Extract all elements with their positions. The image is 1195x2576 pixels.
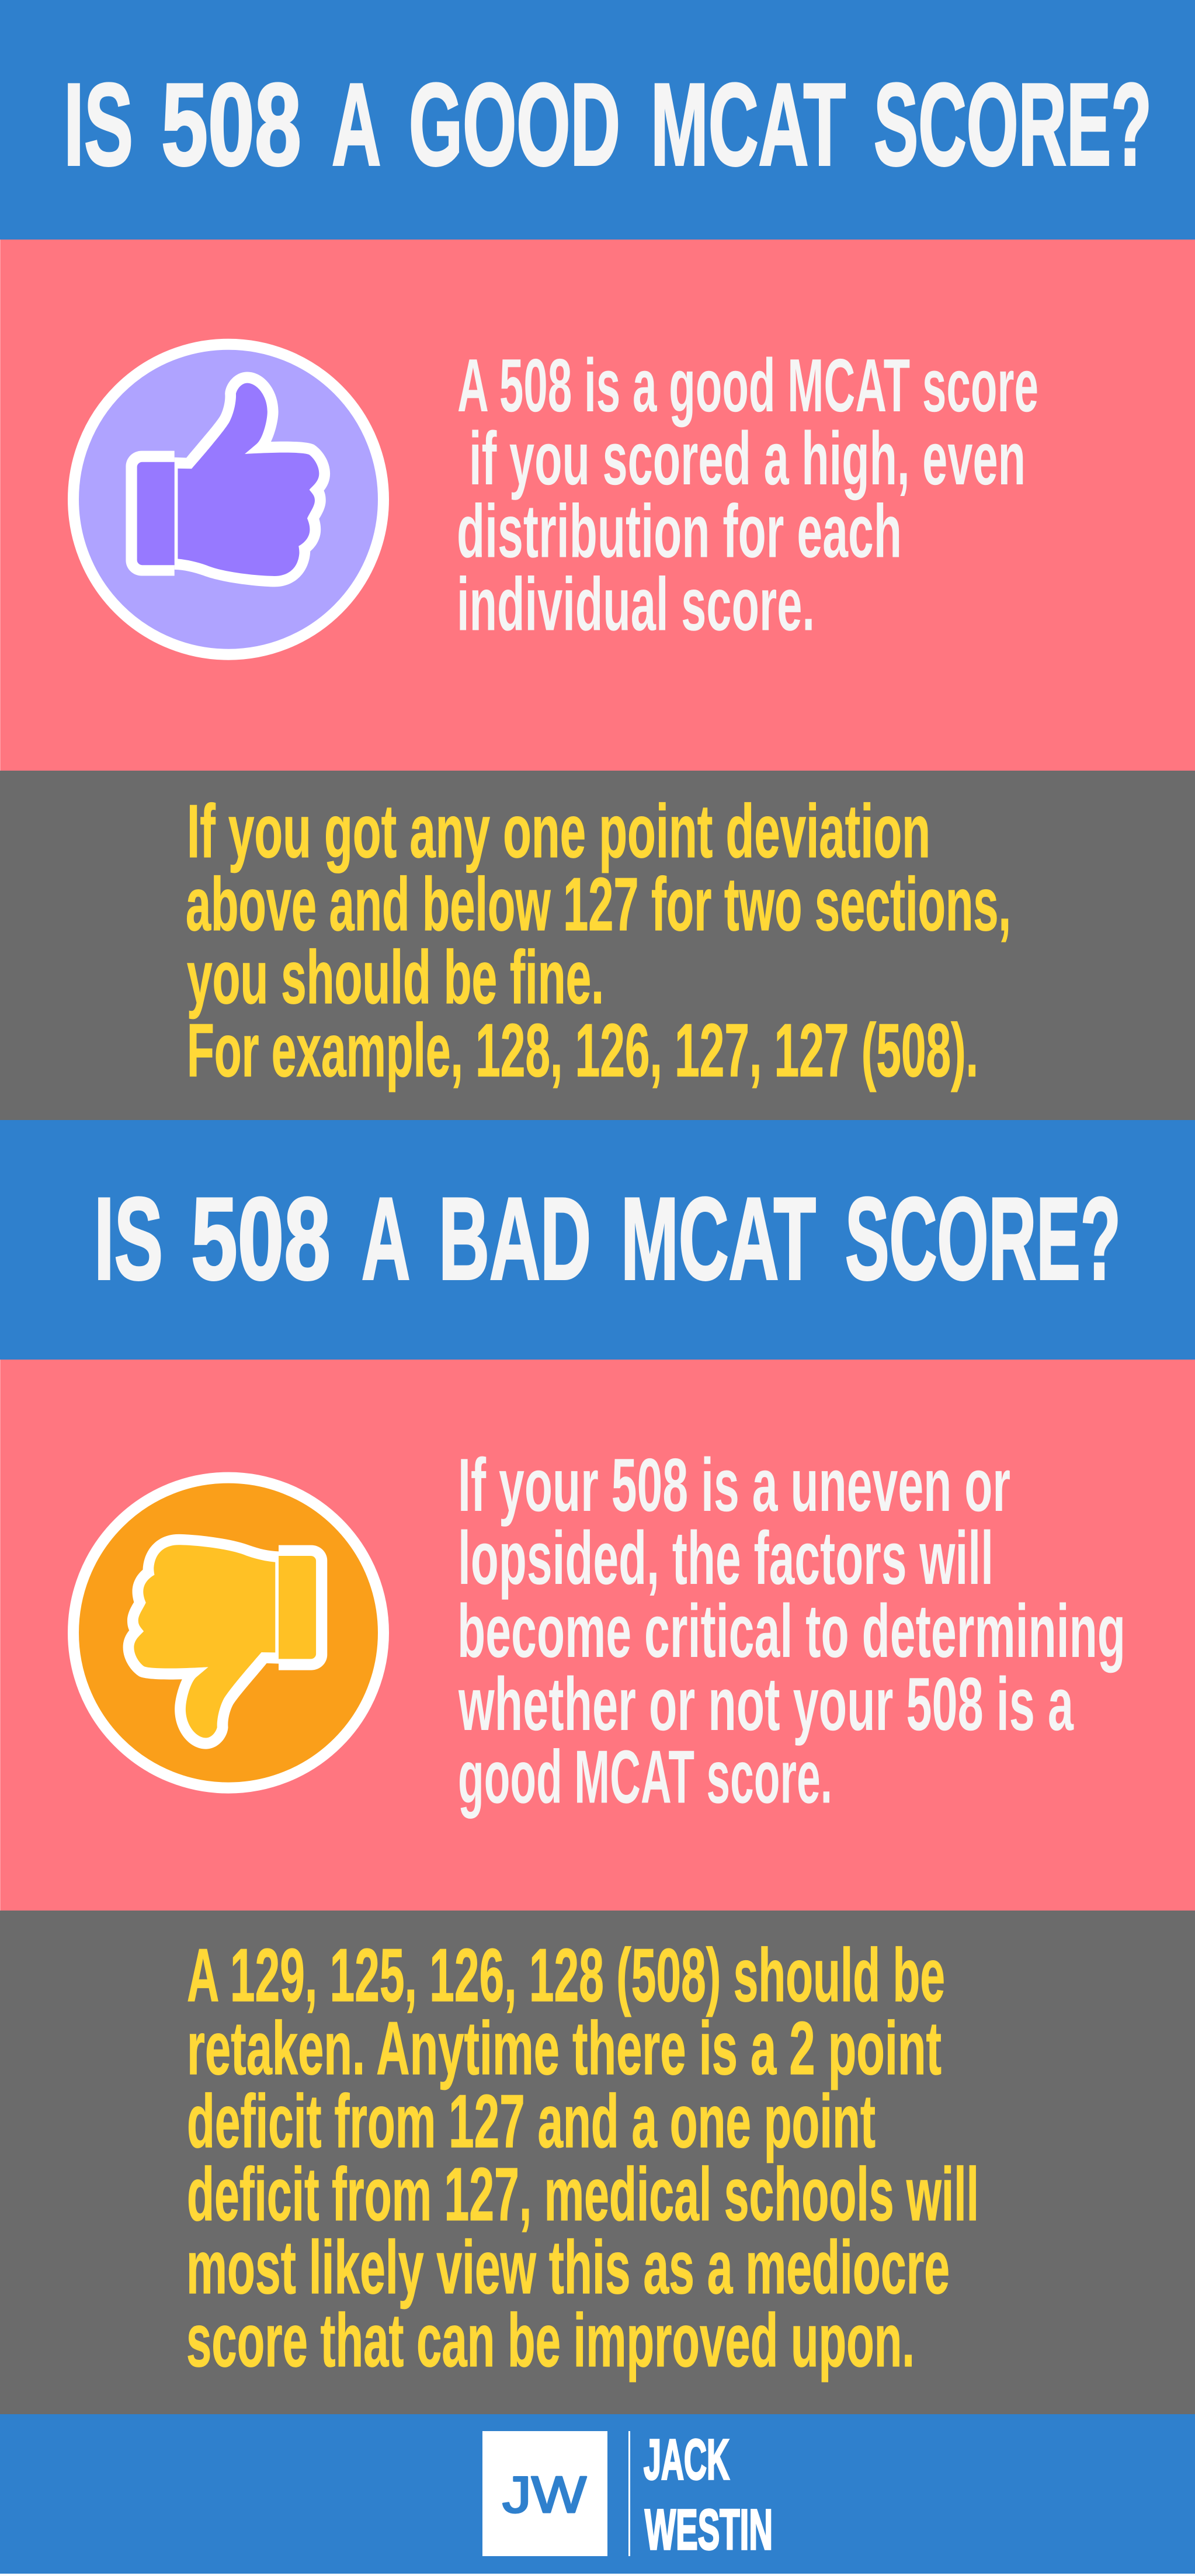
- title: is 508 a good MCAT score: GOOD: [409, 60, 620, 190]
- logo: JW mark: [482, 2431, 607, 2556]
- icon: thumbs down: [74, 1478, 383, 1788]
- text block: good score description: individual score.: [457, 562, 815, 646]
- title: is 508 a good MCAT score: 508: [161, 60, 301, 190]
- title: is 508 a good MCAT score: A: [332, 60, 380, 190]
- logo: JW mark: JW: [502, 2466, 586, 2523]
- icon: thumbs up: [74, 344, 383, 654]
- text block: good score description: [457, 344, 1038, 646]
- panel: bad score explanation: [0, 1360, 1195, 1911]
- panel: bad score example: [0, 1911, 1195, 2414]
- panel: good score heading band: [0, 0, 1195, 240]
- title: is 508 a good MCAT score: MCAT: [651, 60, 846, 190]
- title: is 508 a bad MCAT score: IS: [94, 1174, 163, 1304]
- title: is 508 a bad MCAT score: MCAT: [621, 1174, 816, 1304]
- title: is 508 a bad MCAT score: A: [362, 1174, 409, 1304]
- panel: good score example: [0, 771, 1195, 1120]
- title: is 508 a good MCAT score: IS: [64, 60, 133, 190]
- title: is 508 a bad MCAT score: BAD: [439, 1174, 591, 1304]
- panel: good score explanation: [0, 240, 1195, 771]
- panel: footer: [0, 2414, 1195, 2574]
- title: is 508 a bad MCAT score: 508: [191, 1174, 331, 1304]
- text block: one point deviation example: you should be fine.: [187, 935, 604, 1020]
- text block: one point deviation example: [186, 789, 1011, 1093]
- panel: bad score heading band: [0, 1120, 1195, 1360]
- brand name: WESTIN: [645, 2498, 773, 2561]
- text block: bad score description: good MCAT score.: [458, 1735, 832, 1819]
- text block: retake example: [186, 1933, 979, 2383]
- text block: bad score description: [457, 1443, 1125, 1819]
- brand name: JACK: [644, 2428, 729, 2491]
- text block: good score description: distribution for each: [457, 490, 902, 574]
- brand name: [644, 2428, 773, 2561]
